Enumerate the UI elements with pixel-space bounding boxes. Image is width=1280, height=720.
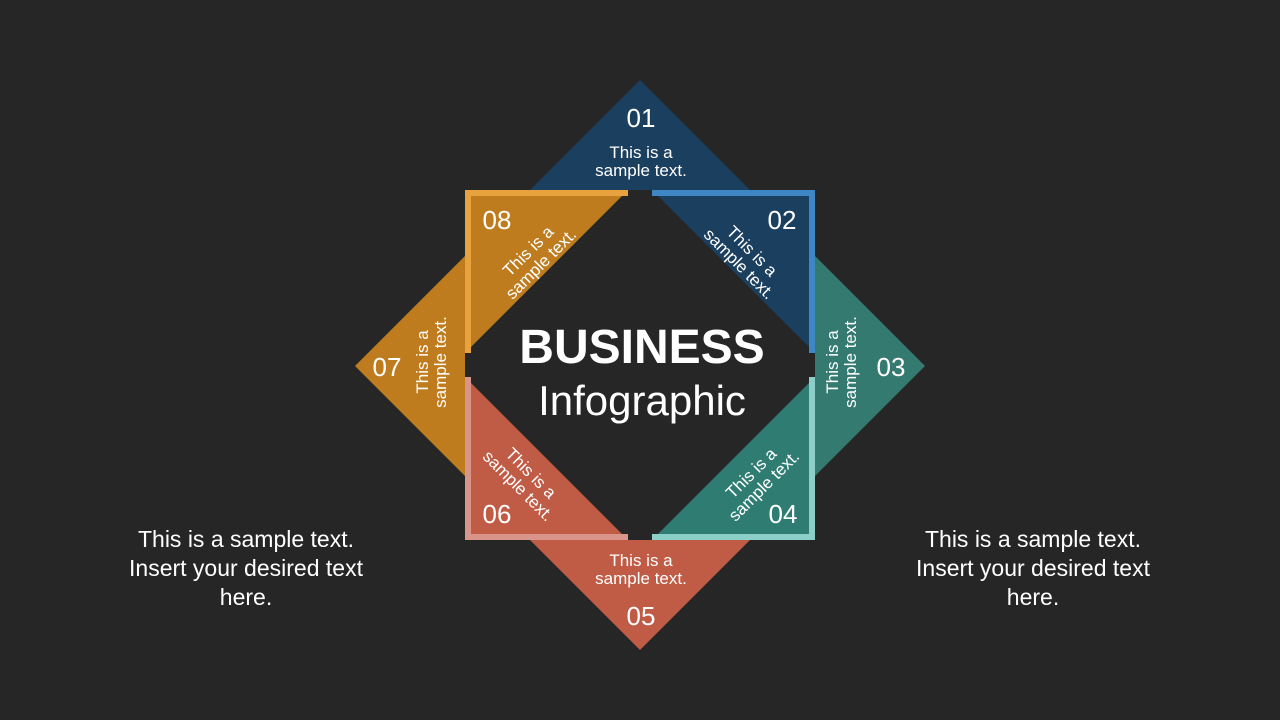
segment 06: This is a [502,444,560,503]
segment 03: 03 [877,352,905,382]
right text block: here. [1007,584,1059,610]
segment 06 [465,377,628,540]
segment 06: sample text. [479,447,557,525]
segment 07: This is a [413,330,432,394]
segment 04: This is a [722,444,781,502]
segment 04: sample text. [725,447,803,525]
segment 07: sample text. [431,316,450,408]
segment 02: sample text. [700,225,778,303]
left text block: here. [220,584,272,610]
title [519,321,765,424]
left text block [129,526,363,610]
segment 08: 08 [483,205,511,235]
segment 06: 06 [483,499,511,529]
segment 05 [530,540,750,650]
segment 03: sample text. [841,316,860,408]
segment 07: 07 [373,352,401,382]
segment 08: This is a [499,222,558,280]
segment 02 [652,190,815,353]
right text block: This is a sample text. [925,526,1141,552]
title: Infographic [538,377,746,424]
segment 05: sample text. [595,569,687,588]
segment 08 [465,190,628,353]
segment 04 [652,377,815,540]
segment 05: This is a [609,551,673,570]
segment 03 [815,256,925,476]
segment 08: sample text. [502,225,580,303]
segment 01: 01 [627,103,655,133]
segment 04: 04 [769,499,797,529]
segment 01 [530,80,750,190]
left text block: This is a sample text. [138,526,354,552]
segment 07 [355,256,465,476]
left text block: Insert your desired text [129,555,363,581]
right text block [916,526,1150,610]
segment 03: This is a [823,330,842,394]
segment 01: This is a [609,143,673,162]
segment 02: This is a [723,222,781,281]
right text block: Insert your desired text [916,555,1150,581]
title: BUSINESS [519,321,765,374]
segment 01: sample text. [595,161,687,180]
segment 05: 05 [627,601,655,631]
segment 02: 02 [768,205,796,235]
